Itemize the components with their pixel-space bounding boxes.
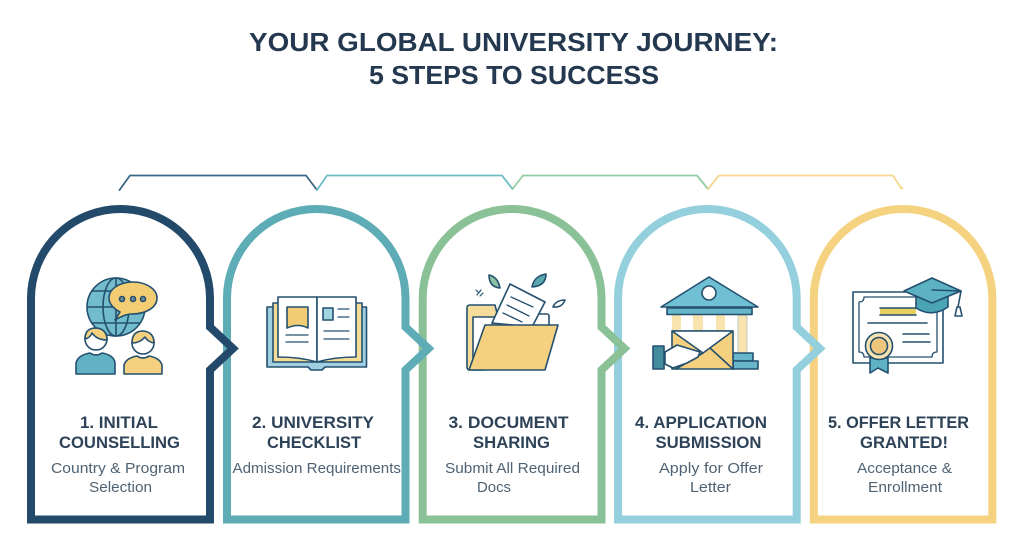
icon: university building with envelope: [653, 277, 758, 369]
step 3 description: Docs: [477, 480, 511, 496]
icon: globe, speech bubble and two people: [76, 278, 162, 374]
step 4 description: Apply for Offer: [659, 461, 763, 477]
step 5 description: [857, 461, 952, 496]
title: 5 STEPS TO SUCCESS: [369, 60, 659, 90]
step 5 heading: GRANTED!: [860, 433, 948, 452]
title: [249, 27, 778, 90]
step 4 description: [659, 461, 763, 496]
step 4: application submission: [618, 209, 820, 520]
step 4 outline: [618, 209, 820, 520]
step 3 heading: 3. DOCUMENT: [448, 413, 569, 432]
step 5: offer letter granted: [814, 209, 992, 520]
step 1 outline: [31, 209, 233, 520]
step 2 heading: [252, 413, 375, 452]
step 4 description: Letter: [690, 480, 731, 496]
step 4 heading: [635, 413, 767, 452]
step 5 outline: [814, 209, 992, 520]
step 1 description: Selection: [89, 480, 152, 496]
title: YOUR GLOBAL UNIVERSITY JOURNEY:: [249, 27, 778, 57]
step 2 outline: [227, 209, 428, 520]
icon: certificate and graduation cap: [853, 278, 962, 373]
step 5 heading: [828, 413, 969, 452]
step 1 description: [51, 461, 185, 496]
step 3 outline: [423, 209, 624, 520]
step 3 description: [445, 461, 580, 496]
step 5 description: Acceptance &: [857, 461, 952, 477]
step 1 description: Country & Program: [51, 461, 185, 477]
step 1 heading: 1. INITIAL: [80, 413, 158, 432]
step 3 description: Submit All Required: [445, 461, 580, 477]
icon: open book: [267, 297, 366, 370]
icon: folder with document and leaves: [467, 274, 565, 370]
step 1 heading: COUNSELLING: [59, 433, 180, 452]
step 5 description: Enrollment: [868, 480, 942, 496]
step 3 heading: [448, 413, 569, 452]
step 2 description: Admission Requirements: [232, 461, 401, 477]
step 1 heading: [59, 413, 180, 452]
step 2 heading: 2. UNIVERSITY: [252, 413, 375, 432]
step 2: university checklist: [227, 209, 428, 520]
step 2 heading: CHECKLIST: [267, 433, 362, 452]
step 3 heading: SHARING: [473, 433, 550, 452]
step 4 heading: 4. APPLICATION: [635, 413, 767, 432]
step 3: document sharing: [423, 209, 624, 520]
step 5 heading: 5. OFFER LETTER: [828, 413, 969, 432]
step 1: initial counselling: [31, 209, 233, 520]
step 4 heading: SUBMISSION: [656, 433, 762, 452]
connector bracket line: [120, 176, 903, 190]
